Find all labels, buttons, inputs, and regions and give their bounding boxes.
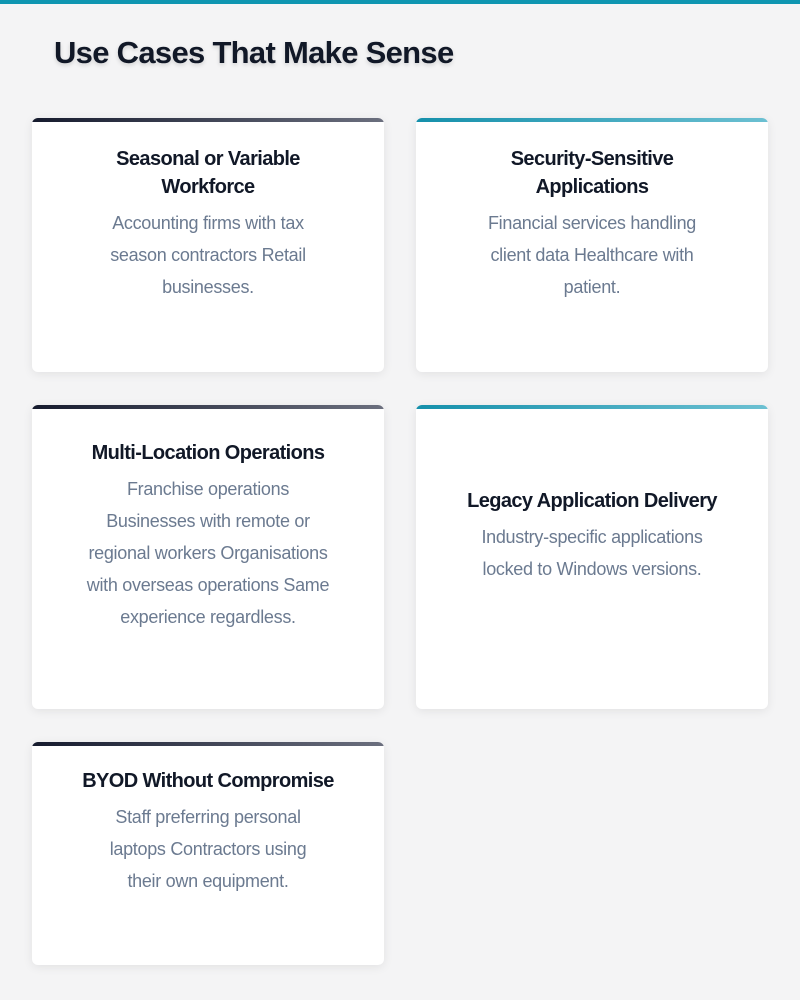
text: multi-location: Franchise operations bbox=[127, 479, 289, 499]
text: multi-location: Multi-Location Operations bbox=[92, 442, 324, 464]
text: security-sensitive: patient. bbox=[564, 277, 620, 297]
text: multi-location: Businesses with remote or bbox=[106, 511, 310, 531]
text: security-sensitive: Applications bbox=[536, 176, 648, 198]
panel: multi-location bbox=[32, 405, 384, 709]
text: seasonal workforce: Workforce bbox=[161, 176, 255, 198]
text: legacy application: locked to Windows versions. bbox=[482, 559, 702, 579]
text: BYOD: laptops Contractors using bbox=[110, 839, 306, 859]
panel: security-sensitive bbox=[416, 118, 768, 372]
title: Use Cases That Make Sense bbox=[54, 35, 454, 70]
text: legacy application: Industry-specific applications bbox=[481, 527, 703, 547]
text: BYOD: BYOD Without Compromise bbox=[82, 770, 334, 792]
text: BYOD: their own equipment. bbox=[127, 871, 289, 891]
text: multi-location bbox=[86, 442, 329, 627]
panel: BYOD bbox=[32, 742, 384, 965]
text: BYOD bbox=[82, 770, 334, 891]
text: seasonal workforce: season contractors Retail bbox=[110, 245, 306, 265]
text: legacy application bbox=[467, 490, 718, 579]
text: seasonal workforce: Accounting firms with tax bbox=[112, 213, 304, 233]
text: security-sensitive bbox=[488, 148, 696, 297]
text: multi-location: experience regardless. bbox=[120, 607, 296, 627]
text: BYOD: Staff preferring personal bbox=[115, 807, 301, 827]
text: security-sensitive: client data Healthcare with bbox=[490, 245, 694, 265]
text: legacy application: Legacy Application Delivery bbox=[467, 490, 717, 512]
panel: seasonal workforce bbox=[32, 118, 384, 372]
text: seasonal workforce bbox=[110, 148, 306, 297]
text: multi-location: regional workers Organisations bbox=[88, 543, 328, 563]
text: seasonal workforce: businesses. bbox=[162, 277, 254, 297]
text: security-sensitive: Financial services handling bbox=[488, 213, 696, 233]
text: multi-location: with overseas operations Same bbox=[87, 575, 329, 595]
text: security-sensitive: Security-Sensitive bbox=[511, 148, 673, 170]
panel: legacy application bbox=[416, 405, 768, 709]
text: seasonal workforce: Seasonal or Variable bbox=[116, 148, 300, 170]
